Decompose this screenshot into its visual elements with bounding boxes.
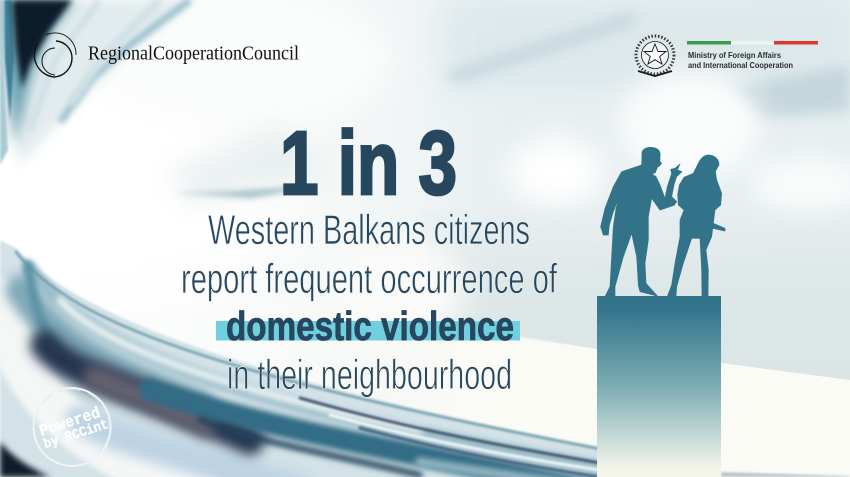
pedestal <box>597 296 721 477</box>
flag bar: red <box>774 41 818 44</box>
silhouette: man <box>601 147 682 297</box>
ministry name <box>688 50 793 70</box>
stamp: Powered by RCCint: by RCCint <box>42 417 111 453</box>
statement text: in their neighbourhood <box>227 351 512 398</box>
icon: emblem of Italy <box>636 36 674 76</box>
silhouettes: arguing couple <box>601 147 725 297</box>
stamp: Powered by RCCint <box>23 378 121 476</box>
silhouette: woman <box>667 155 725 297</box>
statement text <box>181 206 557 398</box>
headline: 1 in 3: 1 in 3 <box>280 114 457 214</box>
logo: Regional Cooperation Council <box>34 33 300 77</box>
statement text: Western Balkans citizens <box>208 206 530 253</box>
statement text: report frequent occurrence of <box>181 255 557 302</box>
ministry name: and International Cooperation <box>688 60 793 70</box>
flag bar: green <box>687 41 731 44</box>
logo wordmark: RegionalCooperationCouncil <box>88 44 300 64</box>
stamp: Powered by RCCint: Powered <box>37 404 103 441</box>
icon: concentric rings <box>34 33 76 77</box>
logo: Ministry of Foreign Affairs <box>636 36 818 76</box>
statement text: domestic violence <box>226 303 514 349</box>
ministry name: Ministry of Foreign Affairs <box>688 50 781 60</box>
highlight bar <box>216 321 520 340</box>
flag bar: white <box>731 41 774 44</box>
